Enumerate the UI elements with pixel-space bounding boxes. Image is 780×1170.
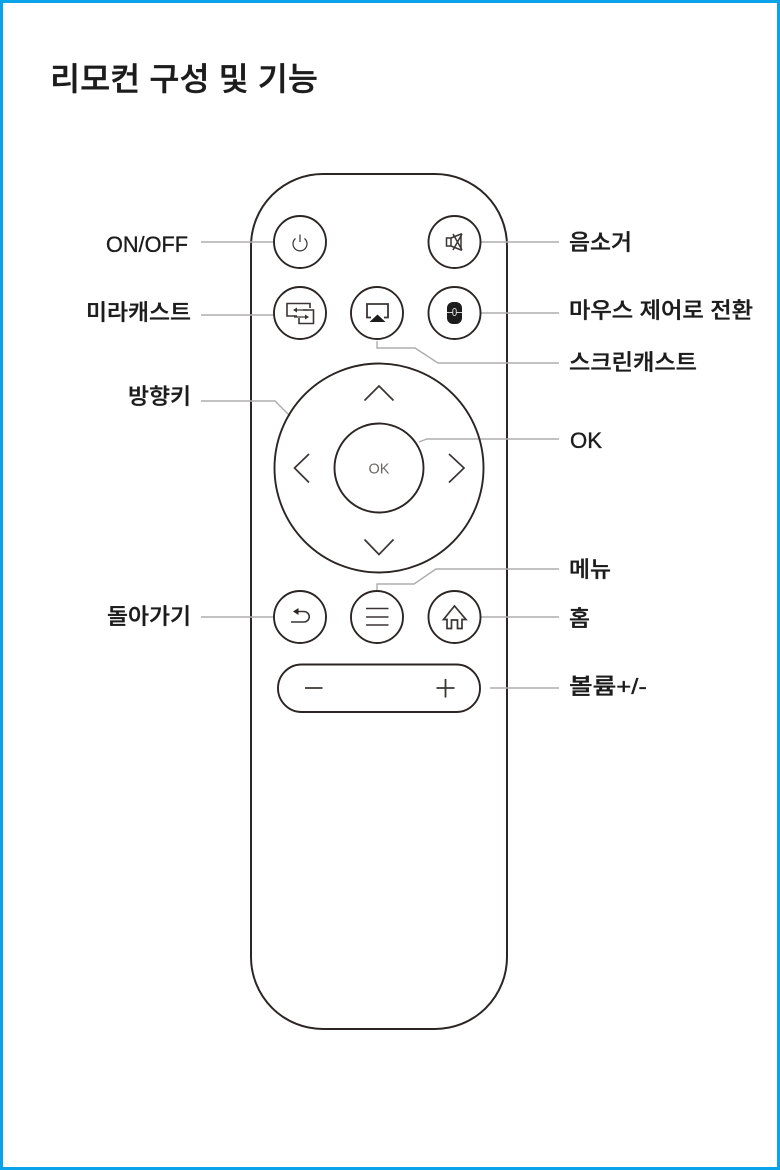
label: 음소거: 음소거 [569,230,632,255]
label: 방향키: 방향키 [128,384,191,409]
label: 메뉴: 메뉴 [569,557,611,582]
title: 리모컨 구성 및 기능 [50,61,318,97]
label: 돌아가기: 돌아가기 [107,604,191,629]
label: 홈: 홈 [569,606,590,631]
OK button: OK [369,462,390,478]
label: ON/OFF: ON/OFF [106,232,188,257]
leader lines [201,242,559,688]
button: power [274,216,326,268]
label: OK: OK [570,428,602,453]
remote body [251,174,507,1029]
button: back [274,591,326,643]
OK button [334,424,424,512]
d-pad [274,364,484,572]
label: 마우스 제어로 전환: 마우스 제어로 전환 [569,298,753,323]
button: screen cast [351,287,403,339]
button: mirror cast [274,287,326,339]
label: 스크린캐스트: 스크린캐스트 [569,350,697,375]
button: mouse control [428,287,480,339]
button: menu [351,591,403,643]
button: mute [428,216,480,268]
label: 미라캐스트: 미라캐스트 [86,300,191,325]
volume rocker [278,664,480,712]
label: 볼륨+/-: 볼륨+/- [569,674,647,699]
button: home [428,591,480,643]
